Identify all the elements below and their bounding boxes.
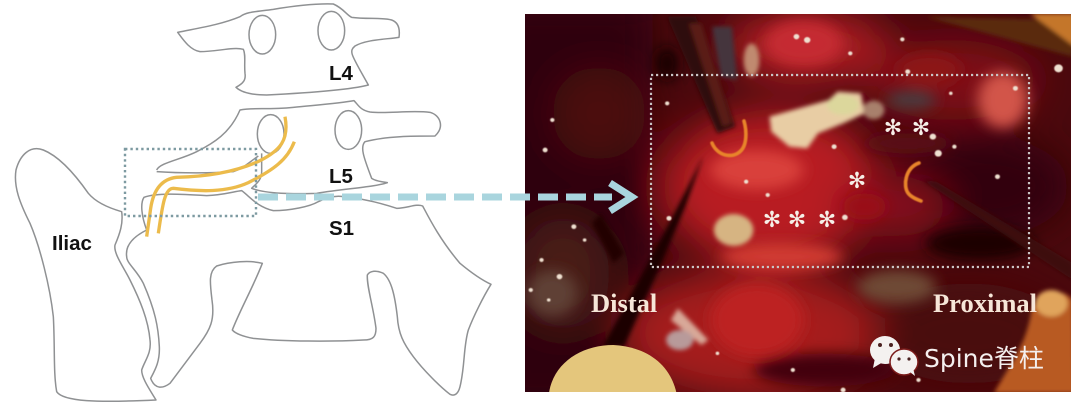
- arrow: diagram to photo: [258, 183, 632, 211]
- photo label: Distal: Distal: [591, 288, 657, 318]
- dotted selection box: [125, 149, 256, 216]
- panel: spine diagram: [15, 4, 491, 401]
- photo: dotted region box: [651, 75, 1029, 267]
- photo: asterisks: [763, 116, 930, 233]
- photo: asterisks: ✻: [912, 116, 930, 141]
- photo: tissue speckle: [529, 34, 1063, 392]
- panel: surgical photo: [525, 14, 1071, 392]
- photo: asterisks: ✻: [818, 208, 836, 233]
- label: S1: S1: [329, 217, 354, 240]
- watermark text: Spine脊柱: [924, 339, 1044, 375]
- watermark icon: chat bubbles: [870, 336, 918, 376]
- photo: asterisks: ✻: [788, 208, 806, 233]
- label: Iliac: Iliac: [52, 232, 92, 255]
- bone outlines: L4, L5, S1 and iliac: [15, 4, 491, 401]
- label: L5: L5: [329, 165, 353, 188]
- photo: asterisks: ✻: [848, 169, 866, 194]
- photo: orange vessel loops: [712, 121, 921, 201]
- photo: asterisks: ✻: [763, 208, 781, 233]
- photo: retractor pad: [549, 345, 677, 395]
- photo: asterisks: ✻: [884, 116, 902, 141]
- nerve roots: [147, 117, 294, 237]
- photo label: Proximal: Proximal: [933, 288, 1037, 318]
- label: L4: L4: [329, 62, 354, 85]
- photo tissue: [525, 14, 1071, 392]
